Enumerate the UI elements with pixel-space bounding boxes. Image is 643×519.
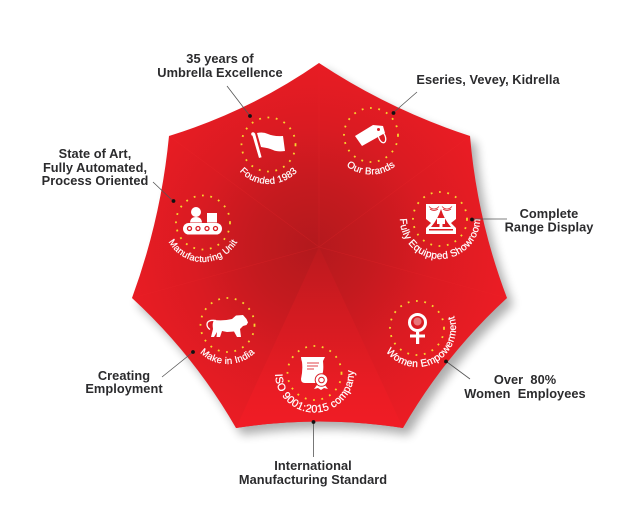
callout: Over 80% Women Employees: Over 80%	[494, 372, 557, 387]
caption: Founded 1983: Founded 1983	[240, 167, 296, 184]
callout: Complete Range Display: Range Display	[505, 220, 594, 234]
callout: Creating Employment: Employment	[85, 381, 163, 396]
callout: Creating Employment	[85, 350, 195, 396]
panel: ISO 9001:2015 company	[274, 345, 356, 413]
icon: conveyor with worker	[183, 207, 222, 234]
callout: State of Art, Fully Automated, Process Oriented: State of Art,	[59, 146, 131, 161]
callout: Complete Range Display: Complete	[520, 206, 578, 221]
panel: Women Empowerment	[387, 300, 456, 368]
callout: 35 years of Umbrella Excellence	[157, 51, 283, 118]
callout: Eseries, Vevey, Kidrella: Eseries, Vevey, Kidrella	[416, 72, 560, 87]
callout: Over 80% Women Employees: Women Employees	[464, 386, 586, 401]
panel: Make in India	[200, 297, 256, 364]
callout: Creating Employment: Creating	[98, 368, 150, 383]
callout: State of Art, Fully Automated, Process Oriented: Process Oriented	[42, 173, 148, 188]
callout: 35 years of Umbrella Excellence: Umbrella Excellence	[157, 65, 283, 80]
umbrella shadow	[138, 70, 513, 435]
callout: Over 80% Women Employees	[444, 360, 586, 401]
icon: female symbol with fist	[410, 314, 426, 344]
icon: stage with curtains	[426, 204, 456, 234]
callout: International Manufacturing Standard: International	[274, 458, 352, 473]
caption: ISO 9001:2015 company: ISO 9001:2015 company	[274, 370, 356, 413]
callout: Eseries, Vevey, Kidrella	[392, 72, 560, 115]
callout: State of Art, Fully Automated, Process Oriented	[42, 146, 175, 203]
caption: Fully Equipped Showroom: Fully Equipped Showroom	[400, 218, 480, 260]
caption: Manufacturing Unit: Manufacturing Unit	[168, 238, 238, 262]
callout: International Manufacturing Standard: Manufacturing Standard	[239, 472, 387, 487]
icon: flag	[251, 132, 285, 158]
callout: International Manufacturing Standard	[239, 420, 387, 487]
callout: 35 years of Umbrella Excellence: 35 years of	[186, 51, 254, 66]
caption: Our Brands: Our Brands	[348, 162, 395, 175]
panel: Manufacturing Unit	[168, 194, 238, 262]
icon: lion	[207, 315, 248, 337]
callout: Complete Range Display	[470, 206, 594, 234]
caption: Women Empowerment: Women Empowerment	[387, 316, 456, 368]
callout: State of Art, Fully Automated, Process Oriented: Fully Automated,	[43, 160, 147, 175]
umbrella canopy	[132, 63, 507, 428]
panel: Founded 1983	[240, 116, 296, 184]
icon: price tag	[355, 125, 387, 146]
panel: Fully Equipped Showroom	[400, 191, 480, 260]
caption: Make in India: Make in India	[200, 348, 255, 364]
panel: Our Brands	[343, 107, 399, 175]
icon: certificate scroll	[301, 357, 328, 390]
